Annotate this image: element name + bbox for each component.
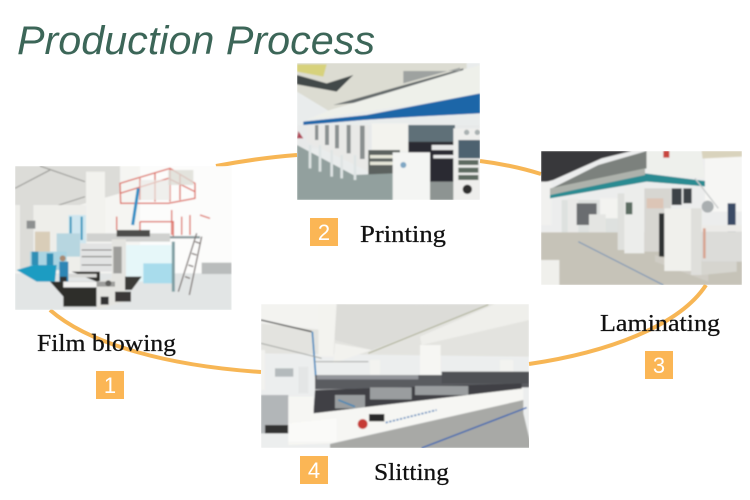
badge 3: 3	[653, 353, 665, 378]
photo: film blowing	[15, 166, 232, 310]
badge 1: 1	[104, 373, 116, 398]
label: laminating: Laminating	[600, 311, 720, 337]
badge 4: 4	[308, 458, 320, 483]
photo: laminating	[541, 151, 742, 285]
badge 4	[300, 456, 328, 484]
title: Production Process	[17, 19, 375, 63]
photo: slitting	[261, 304, 532, 448]
label: slitting: Slitting	[374, 460, 449, 486]
label: film blowing: Film blowing	[37, 331, 176, 357]
badge 2: 2	[318, 220, 330, 245]
badge 2	[310, 218, 338, 246]
label: printing: Printing	[360, 222, 446, 248]
photo: printing	[297, 63, 480, 200]
process flow arcs	[50, 155, 706, 372]
badge 1	[96, 371, 124, 399]
badge 3	[645, 351, 673, 379]
